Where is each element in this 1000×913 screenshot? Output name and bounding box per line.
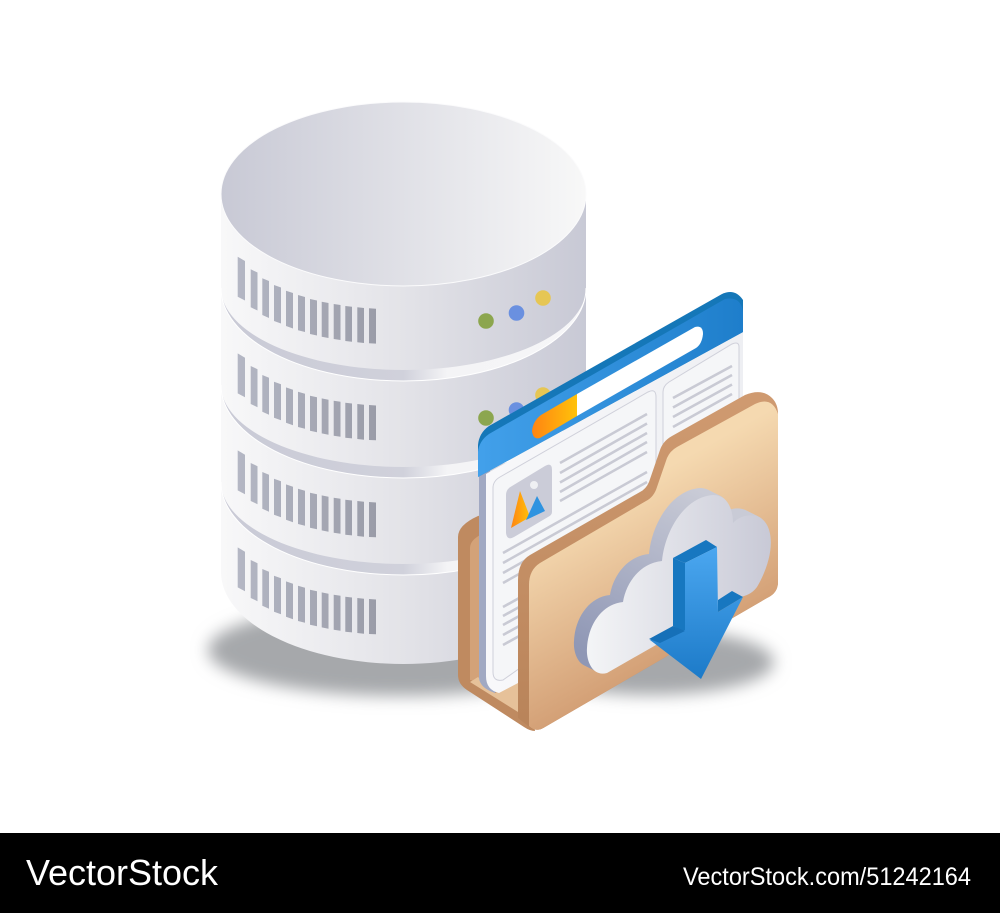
- database server cylinder: [221, 102, 586, 664]
- window title bar: [478, 299, 743, 477]
- left content panel: [493, 391, 656, 680]
- window page body: [486, 330, 743, 693]
- folder back panel: [458, 510, 535, 731]
- right content panel: [663, 343, 739, 470]
- address bar: [532, 327, 703, 438]
- vent bars tier 1: [238, 257, 376, 344]
- vent bars tier 3: [238, 450, 376, 537]
- cylinder top face: [221, 102, 586, 286]
- folder front: [518, 392, 778, 730]
- folder floor: [470, 677, 518, 712]
- image reference: VectorStock.com/51242164: [683, 863, 971, 891]
- status lights tier 1: [478, 290, 551, 329]
- folder inner wall: [470, 530, 518, 690]
- watermark bar: [0, 833, 1000, 913]
- seam between server tiers 1 and 2: [221, 288, 586, 381]
- folder front face: [529, 402, 778, 730]
- status lights tier 2: [478, 387, 551, 426]
- ground shadow: [208, 604, 774, 696]
- window side edge: [479, 470, 500, 693]
- text lines: [503, 414, 647, 645]
- vent bars tier 2: [238, 353, 376, 440]
- browser window: [478, 292, 743, 693]
- folder rim: [518, 392, 778, 730]
- cloud front: [587, 495, 771, 674]
- cloud depth: [574, 488, 770, 673]
- cloud download icon: [574, 488, 771, 679]
- brand name: VectorStock: [26, 852, 219, 893]
- seam between server tiers 3 and 4: [221, 482, 586, 575]
- window title bar edge: [478, 292, 743, 477]
- seam between server tiers 2 and 3: [221, 385, 586, 478]
- download arrow: [649, 540, 743, 679]
- vent bars tier 4: [238, 547, 376, 634]
- image thumbnail: [506, 465, 552, 538]
- cylinder body: [221, 194, 586, 664]
